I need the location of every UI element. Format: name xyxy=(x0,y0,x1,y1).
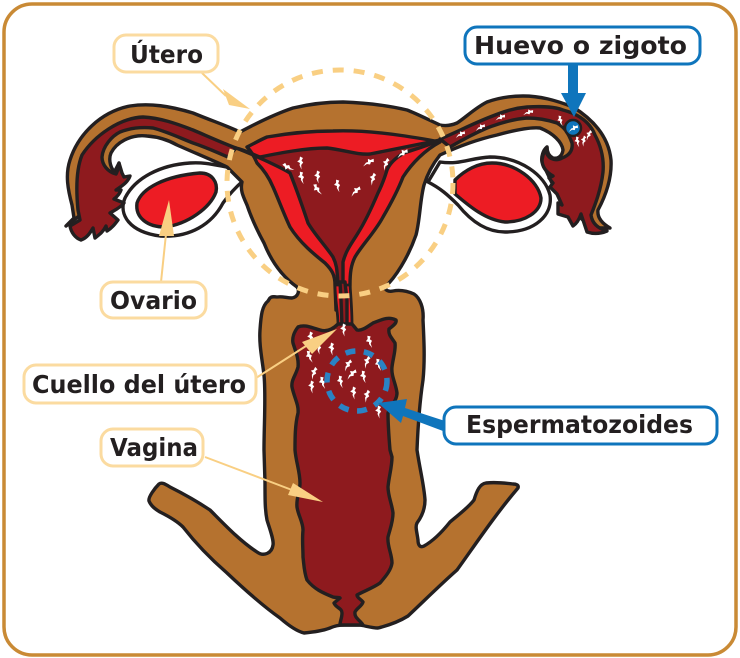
arrow: Huevo o zigoto xyxy=(561,63,586,117)
label: Huevo o zigoto: Huevo o zigoto xyxy=(474,31,687,60)
right fallopian tube lumen and fimbriae xyxy=(440,107,607,233)
left fallopian tube lumen and fimbriae xyxy=(70,117,236,240)
uterus, tubes and vagina body xyxy=(66,96,611,633)
left ovary xyxy=(123,163,244,236)
arrow: Ovario xyxy=(159,200,174,282)
uterine wall xyxy=(247,131,440,310)
dashed circle around sperm xyxy=(327,351,387,411)
uterine cavity xyxy=(236,140,440,285)
label: Vagina: Vagina xyxy=(110,433,198,462)
sperm in uterus xyxy=(281,147,409,198)
label: Ovario: Ovario xyxy=(110,286,197,315)
egg or zygote xyxy=(565,120,581,136)
label: Útero xyxy=(114,35,218,72)
label: Espermatozoides: Espermatozoides xyxy=(466,410,693,439)
arrow: Vagina xyxy=(205,457,323,502)
sperm in vagina xyxy=(304,324,383,418)
label: Útero: Útero xyxy=(130,39,203,69)
label: Cuello del útero: Cuello del útero xyxy=(32,370,246,399)
arrow: Espermatozoides xyxy=(378,399,445,431)
arrow: Útero xyxy=(202,73,250,109)
dashed circle around uterus xyxy=(227,70,453,296)
label: Espermatozoides xyxy=(444,407,717,444)
label: Vagina xyxy=(101,429,203,466)
vaginal cavity xyxy=(292,318,397,625)
arrow: Cuello del útero xyxy=(256,329,337,378)
cervical canal xyxy=(335,282,352,326)
sperm in right tube xyxy=(454,108,593,148)
right ovary xyxy=(428,157,550,232)
